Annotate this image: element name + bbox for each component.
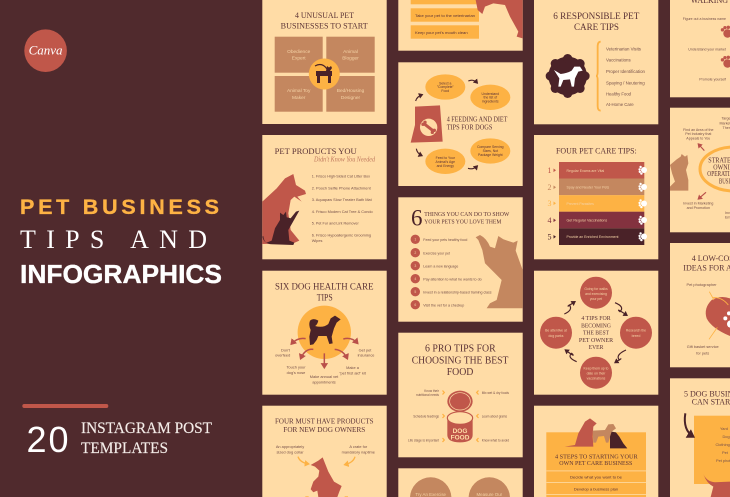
heading: 4 TIPS FOR [581,315,611,322]
numbered product list [312,174,373,243]
icon: scalloped dog badge [546,54,590,98]
square labels: Obedience [287,49,311,55]
ellipse labels: ingredients [482,100,499,104]
right labels: Know what to avoid [482,438,509,442]
heading: THE BEST [583,330,609,337]
circle labels [545,287,646,380]
side labels: Invest in Marketing [683,202,713,206]
circle labels: Try An Exercise [415,492,447,497]
heading: FOOD [447,367,473,378]
heading: 4 FEEDING AND DIET [447,115,508,123]
circle labels: your pet [590,297,602,301]
bullet numbers: 4 [414,277,416,281]
list text: Take your pet to the veterinarian [415,13,475,18]
can label: FOOD [451,434,470,442]
numerals: 2 [548,183,552,192]
heading: 4 UNUSUAL PET [295,11,354,20]
labels: mandatory naptime [342,450,375,454]
numbered product list: 3. Aquapaw Slow Treater Bath Mat [312,197,373,202]
panel: 5 dog businesses [670,378,730,497]
heading: 6 PRO TIPS FOR [425,344,496,355]
right labels [482,390,509,442]
labels [275,348,374,384]
heading: 4 STEPS TO STARTING YOUR [555,453,638,460]
heading: SIX DOG HEALTH CARE [275,281,374,291]
right labels: Mix wet & dry foods [482,390,509,395]
labels: overfeed [275,352,290,358]
circle labels: and exercising [585,292,607,296]
list text: Exercise your pet [423,250,451,255]
left labels: nutritional needs [416,392,439,397]
dark arrow [685,413,693,437]
template label: TEMPLATES [81,440,168,457]
arrows [291,338,358,368]
ellipse labels: Select a [439,82,452,86]
bullet numbers: 2 [414,251,416,255]
circle labels: breed [632,334,640,338]
panel: six things to show your pets love [398,197,523,322]
labels: "pet first aid" kit [339,370,367,376]
panel: 4 tips for best pet owner [534,271,658,395]
ellipse labels: the list of [484,96,497,100]
labels: Gift basket service [687,344,719,349]
heading: TIPS FOR DOGS [447,123,492,131]
tan circles [410,477,510,497]
right labels: Learn about grains [482,414,507,418]
panel: 4 steps to starting pet care business [534,406,658,497]
step text: Develop a business plan [574,486,618,492]
labels: Get pet [359,348,372,352]
panel: 4 unusual pet businesses [262,0,387,124]
large numeral: 6 [411,206,422,230]
list text: Learn a new language [423,263,458,268]
icon: cat silhouette [670,154,688,191]
bar labels: Regular Exams are Vital [566,168,604,173]
grid of four squares [275,37,375,112]
tips list [606,46,645,107]
title line: tips and: TIPS AND [20,225,207,254]
heading [424,211,510,225]
numerals: 3 [548,199,552,208]
heading [275,416,374,434]
labels: Don't [281,348,291,352]
side labels: Pet Industry that [685,132,711,136]
labels: appointments [312,380,336,384]
list text: Understand your market [688,46,727,52]
ellipse labels: Food [441,89,449,93]
tips list: Spaying / Neutering [606,80,645,86]
list text: Clothing [716,442,730,447]
bullet numbers: 6 [414,303,416,307]
script subheading: Didn't Know You Needed [313,156,375,164]
list text: Pay attention to what he wants to do [423,276,482,281]
bar labels: Prevent Parasites [566,201,594,206]
square labels: Maker [292,95,306,101]
pointer triangles [554,168,556,239]
numbered product list: 6. Frisco Hypoallergenic Grooming [312,232,371,238]
red arrows [698,144,706,199]
heading: FOR NEW DOG OWNERS [283,425,365,434]
side labels: Appeals to You [686,136,710,140]
icon: dog food can [447,391,473,442]
logo: Canva badge: Canva [29,42,63,58]
tips list: At-Home Care [606,102,634,107]
chevrons [442,390,478,442]
template count: 20 [26,419,68,460]
heading: 6 RESPONSIBLE PET [553,11,640,21]
list text: Promote yourself [699,76,727,82]
logo: Canva badge [24,29,67,72]
labels: Make annual vet [310,374,339,379]
icon: red dog silhouette [703,474,730,497]
ellipse labels: Understand [482,92,499,96]
heading: CHOOSING THE BEST [412,355,508,366]
icon: three dogs [565,418,627,448]
heading [412,344,508,378]
orange list bars [411,0,479,39]
orange arrows [298,457,355,497]
panel: six dog health care tips [262,271,387,395]
heading [555,453,638,467]
icon: dog and cat silhouettes [262,174,306,245]
labels [276,444,375,454]
panel: 4 low-cost ideas [670,243,730,367]
heading: PET PRODUCTS YOU [275,146,357,156]
orange block [694,416,730,484]
labels: An appropriately [276,444,304,449]
list text: Pet [722,450,729,455]
side labels: Find an Area of the [683,128,713,132]
numbered product list: Wipes [312,238,322,243]
step text: Decide what you want to be [570,474,622,480]
accent bar [22,404,108,408]
labels: Touch your [286,364,306,370]
white paws [638,166,647,241]
panel: 6 responsible pet care tips [534,0,658,124]
bullet numbers: 1 [414,238,416,242]
heading: YOUR PETS YOU LOVE THEM [424,218,501,225]
squiggle arrows [564,302,627,363]
numerals [548,166,552,242]
square labels: Animal Toy [287,88,311,94]
heading [275,281,374,302]
tips list: Vaccinations [606,58,631,62]
left labels [408,388,440,442]
heading [683,254,730,273]
side labels [683,116,730,220]
numerals: 1 [548,166,552,175]
icon: heart with paw [706,292,730,339]
template label: INSTAGRAM POST [81,420,213,437]
red circles [540,277,652,389]
panel: exercise and measure circles [398,468,523,497]
icon: rearing dog silhouette [311,457,342,497]
numbered product list: 4. Frisco Modern Cat Tree & Condo [312,209,373,214]
labels: sized dog collar [276,450,304,454]
orange block [546,432,646,497]
heading [447,115,508,131]
bullet numbers: 5 [414,290,416,294]
labels: Pet photographer [686,282,717,287]
square labels: Bed/Housing [337,88,365,94]
left labels: Schedule feedings [413,414,439,418]
panel: four must have products [262,406,387,497]
bullet numbers [414,238,416,307]
heading: FOUR MUST HAVE PRODUCTS [275,416,374,425]
list text [415,13,475,35]
circle labels: Keep them up to [584,366,609,370]
numbered product list: 1. Frisco High-Sided Cat Litter Box [312,174,370,178]
title line: pet business: PET BUSINESS [20,195,219,219]
template label [81,420,213,457]
orange circle [298,306,351,359]
left labels: Know their [424,388,440,393]
labels: dog's nose [287,370,305,375]
circle labels: Going for walks [584,287,608,291]
list text: Visit the vet for a checkup [423,302,464,307]
square labels: Expert [292,56,306,62]
labels [686,282,719,356]
bar labels: Spay and Neuter Your Pets [566,184,609,190]
list text [683,16,727,82]
ellipse labels: Sizes, Not [483,149,498,153]
heading: EVER [589,344,604,351]
dark arrows [416,80,477,169]
labels: insurance [358,352,374,358]
panel: cover text [20,29,222,460]
list text [423,237,492,307]
circle labels: vaccinations [587,376,606,380]
ellipse labels: Package Weight [478,153,503,157]
bar labels [566,168,619,239]
icon: food bag with bone [411,105,443,143]
red paws [721,26,730,68]
square labels: Animal [343,49,358,55]
number bullets [411,235,420,309]
ellipse labels: Feed to Your [436,156,456,160]
stacked colour bars [559,162,644,245]
orange brace [596,42,601,111]
heading [281,11,368,31]
circle labels: date on their [587,372,606,376]
square labels: Designer [341,95,360,101]
ellipse labels: Animal's Age [436,160,455,164]
can label [451,428,470,442]
square labels: Blogger [342,56,359,62]
panel: 6 pro tips for choosing food [398,333,523,457]
list text: Figure out a business name [683,16,726,21]
can label: DOG [453,428,467,435]
heading: FOUR PET CARE TIPS: [556,145,637,155]
bullet numbers: 3 [414,264,416,268]
circle labels: Be attentive at [545,328,567,332]
icon: animal silhouette [476,0,523,38]
panel: walking business partial [670,0,730,97]
numerals: 4 [548,216,552,225]
heading: THINGS YOU CAN DO TO SHOW [424,211,510,218]
icon: cat on table [309,58,340,90]
circle labels: Research the [626,328,646,332]
numerals: 5 [548,232,552,242]
panel: strategies for owning a business [670,108,730,232]
panel: four pet care tips [534,135,658,259]
list text: Yard [720,426,728,431]
circle labels: dog parks [549,334,564,338]
heading: BUSINESSES TO START [281,22,368,31]
heading: TIPS [317,292,333,302]
ellipse labels [436,82,504,168]
ellipse labels: and Energy [437,164,454,168]
heading [707,157,730,185]
heading [684,390,730,406]
orange ellipses [425,74,510,174]
panel: pet products you didn't know [262,135,387,259]
heading: PET OWNER [579,337,614,344]
list text: Keep your pet's mouth clean [415,30,468,35]
tips list: Veterinarian Visits [606,46,642,52]
labels: Make a [346,365,360,370]
step dividers [546,470,646,495]
tips list: Proper Identification [606,69,645,74]
list text: Feed your pets healthy food [423,237,467,242]
bar labels: Provide an Enriched Environment [566,234,619,239]
labels: A crate for [349,444,368,449]
bar labels: Get Regular Vaccinations [566,218,607,222]
tips list: Healthy Food [606,92,631,96]
heading: OWN PET CARE BUSINESS [559,460,633,467]
left labels: Life stage is important [408,438,440,442]
step text [570,474,622,492]
heading: BECOMING [581,322,611,329]
heading [579,315,614,351]
numbered product list: 2. Pooch Selfie Phone Attachment [312,186,372,190]
heading: CARE TIPS [574,22,619,32]
panel: feeding and diet tips [398,62,523,186]
ellipse labels: "Complete" [437,85,455,89]
title line: infographics: INFOGRAPHICS [20,261,222,289]
circle labels [415,492,503,497]
circle labels: Measure Our [476,492,503,497]
orange ring [700,147,730,191]
square labels [287,49,365,101]
list text [716,426,730,463]
list text: Invest in a relationship-based training class [423,289,492,294]
panel: dog care list top [398,0,523,51]
labels: for pets [696,350,709,356]
numbered product list: 5. Pet Fur and Lint Remover [312,220,359,226]
ellipse labels: Compare Serving [477,145,504,149]
list text: Dog [722,434,730,439]
icon: cat silhouette [476,235,523,308]
heading [553,11,640,32]
icon: dog silhouette [309,316,341,345]
side labels: and Promotion [687,206,710,210]
